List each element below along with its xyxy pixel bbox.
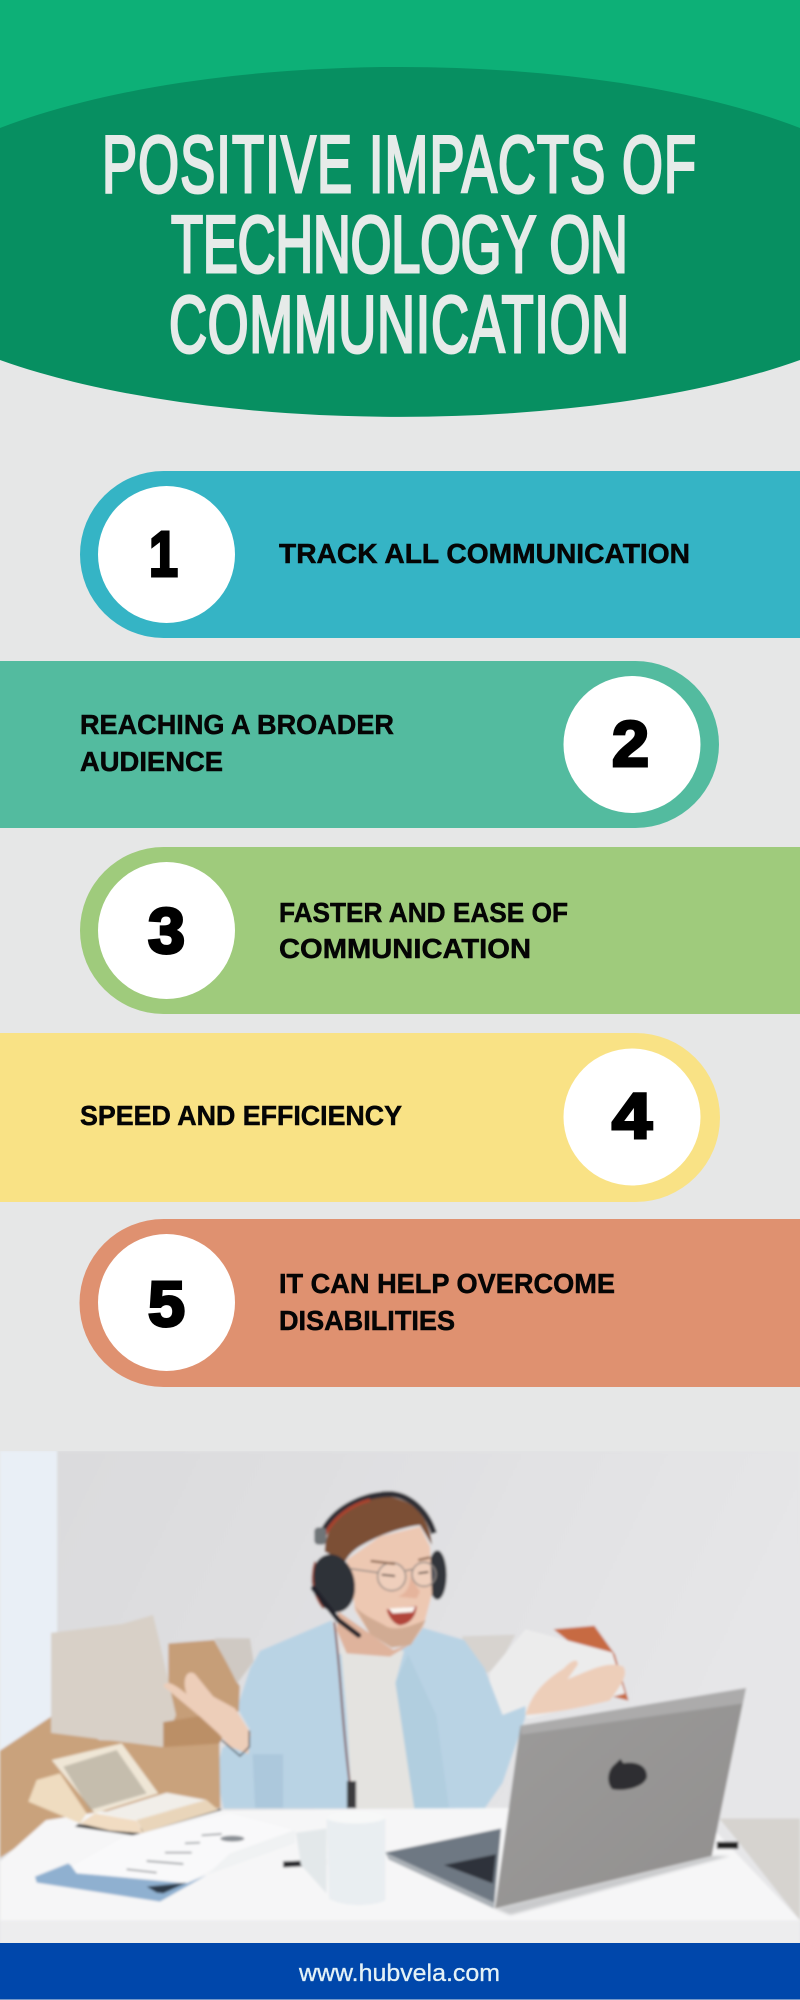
mug handle <box>296 1829 327 1894</box>
beard shadow <box>356 1608 426 1648</box>
wall <box>58 1452 740 1850</box>
text: reaching a broader audience: AUDIENCE <box>80 746 223 777</box>
face <box>347 1527 432 1648</box>
paper oval <box>220 1836 244 1842</box>
nose <box>400 1578 420 1598</box>
laptop shadow <box>495 1856 730 1915</box>
text: faster and ease of communication: FASTER AND EASE OF <box>279 897 568 928</box>
mic boom <box>313 1588 359 1635</box>
curtain <box>0 1451 57 1754</box>
book cover shadow <box>75 1809 222 1835</box>
mug rim <box>326 1811 385 1824</box>
black pen <box>283 1860 327 1867</box>
left cuff <box>222 1731 249 1756</box>
papers <box>72 1813 293 1882</box>
right ear cup <box>428 1550 447 1600</box>
laptop base edge <box>385 1852 494 1909</box>
text: reaching a broader audience: REACHING A BROADER <box>80 709 394 740</box>
striped pillow <box>51 1615 176 1747</box>
floor <box>719 1819 800 1920</box>
book block <box>137 1800 218 1833</box>
laptop logo <box>608 1759 647 1790</box>
book left pages <box>28 1773 87 1823</box>
mouth <box>387 1606 417 1625</box>
number circle 2 <box>564 676 700 813</box>
tan throw <box>0 1715 220 1858</box>
brows <box>371 1557 430 1564</box>
header ellipse <box>0 67 800 417</box>
text: faster and ease of communication <box>279 897 568 964</box>
headset plug <box>347 1781 356 1808</box>
title: COMMUNICATION <box>169 280 629 370</box>
book page up <box>52 1743 158 1813</box>
headset cable <box>334 1622 349 1781</box>
shirt front placket <box>398 1682 416 1806</box>
neck <box>337 1612 412 1657</box>
number circle 4 <box>564 1048 700 1186</box>
book bottom <box>80 1813 143 1833</box>
left hand <box>163 1673 251 1754</box>
glasses <box>350 1562 436 1591</box>
seat shadow <box>162 1716 224 1748</box>
title: TECHNOLOGY ON <box>171 200 628 290</box>
text: it can help overcome disabilities <box>279 1268 615 1336</box>
desk front <box>2 1922 798 1942</box>
right hand <box>526 1661 625 1715</box>
photo: man with headset at laptop <box>0 1451 800 1944</box>
grey cushion <box>214 1638 254 1684</box>
title <box>102 120 696 370</box>
laptop base <box>385 1829 501 1909</box>
number 5: 5 <box>148 1268 185 1340</box>
cup rim <box>313 1562 323 1608</box>
power plug <box>717 1842 738 1849</box>
panel: item 4 <box>0 1033 720 1202</box>
left ear cup <box>310 1552 356 1614</box>
headband red <box>325 1500 370 1535</box>
text: track all communication: TRACK ALL COMMUNICATION <box>279 538 690 569</box>
slider <box>314 1527 326 1545</box>
header band <box>0 0 800 200</box>
t-shirt <box>341 1647 414 1809</box>
title: POSITIVE IMPACTS OF <box>102 120 696 210</box>
right sofa <box>462 1634 514 1672</box>
shirt <box>216 1620 526 1809</box>
text: faster and ease of communication: COMMUNICATION <box>279 933 531 964</box>
panel: item 5 <box>80 1219 800 1387</box>
number 1: 1 <box>149 518 178 590</box>
orange cushion <box>554 1626 629 1701</box>
number circle 3 <box>98 862 235 999</box>
folder sheet edge <box>207 1830 295 1875</box>
text: it can help overcome disabilities: DISABILITIES <box>279 1305 455 1336</box>
number 2: 2 <box>612 708 649 780</box>
keyboard <box>444 1854 496 1884</box>
hair <box>325 1497 432 1562</box>
eye <box>382 1572 428 1576</box>
paper marks <box>127 1834 222 1873</box>
number circle 5 <box>98 1234 235 1371</box>
panel: item 3 <box>80 847 800 1014</box>
folder <box>35 1863 207 1902</box>
number 4: 4 <box>612 1080 652 1152</box>
number 3: 3 <box>148 895 185 967</box>
shirt shadows <box>253 1754 283 1808</box>
mug <box>327 1815 385 1905</box>
desk <box>0 1807 798 1921</box>
footer bar <box>0 1943 800 2000</box>
lid strip <box>520 1688 746 1735</box>
number circle 1 <box>98 486 235 623</box>
panel: item 1 <box>80 471 800 638</box>
book right page <box>100 1793 207 1820</box>
teeth <box>389 1607 415 1613</box>
text: it can help overcome disabilities: IT CAN HELP OVERCOME <box>279 1268 615 1299</box>
headband <box>319 1494 434 1540</box>
laptop lid <box>495 1688 746 1909</box>
book printed text <box>63 1750 147 1810</box>
panel: item 2 <box>0 661 719 828</box>
back cushion <box>168 1640 240 1722</box>
text: reaching a broader audience <box>80 709 394 777</box>
footer text: www.hubvela.com <box>298 1960 500 1987</box>
folder spine <box>147 1883 187 1893</box>
text: speed and efficiency: SPEED AND EFFICIENCY <box>80 1100 402 1131</box>
white pillow <box>490 1629 625 1719</box>
